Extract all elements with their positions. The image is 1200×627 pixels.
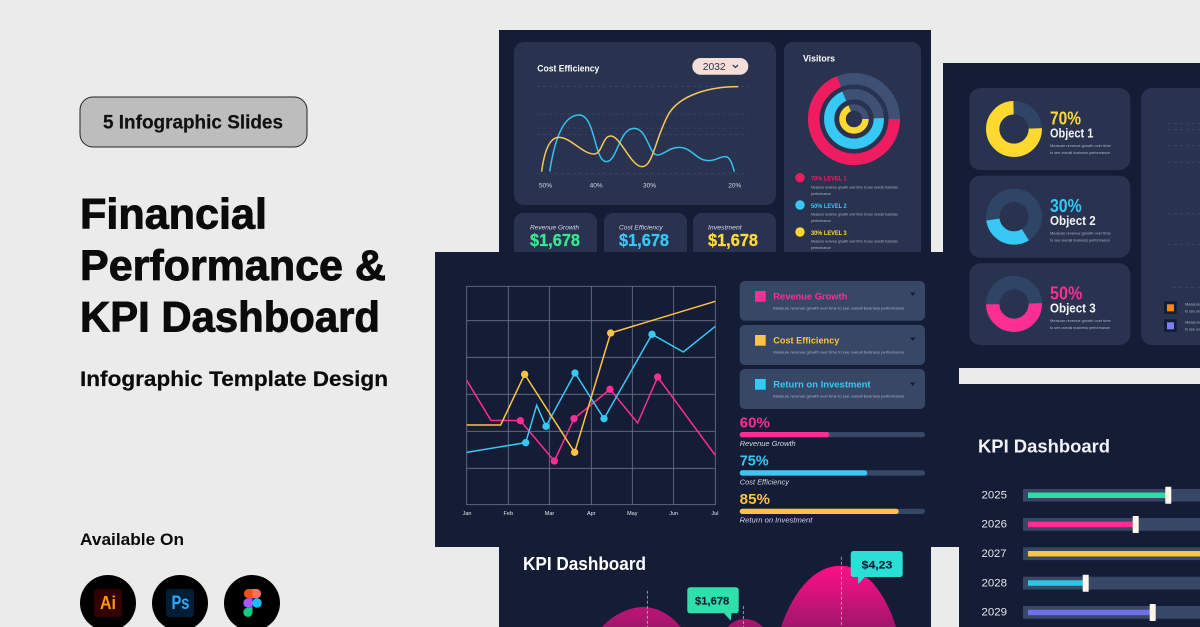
axis labels: 30%: [643, 182, 656, 189]
slider: 2027: [982, 547, 1200, 560]
progress: revenue growth 60%: [740, 414, 925, 448]
heading: KPI Dashboard: KPI Dashboard: [978, 437, 1110, 457]
axis labels: months: Jun: [669, 511, 678, 517]
legend: orange: [1164, 301, 1200, 314]
card: object 3: to see overall business performance: [1050, 326, 1110, 330]
card: investment: [693, 213, 776, 258]
card: cost efficiency metric: Measure revenue growth over time to see overall business performance: [773, 350, 904, 354]
progress: revenue growth 60%: 60%: [740, 414, 770, 431]
icon: Adobe Photoshop: [152, 575, 208, 627]
card: object 2: [969, 176, 1130, 258]
badge: 5 Infographic Slides: 5 Infographic Slides: [103, 112, 283, 133]
legend: orange: Measure: [1185, 302, 1200, 306]
radial chart: [814, 79, 894, 159]
title: Financial: [80, 190, 267, 238]
dropdown: 2032: [692, 58, 748, 75]
line chart: cost efficiency curves: [542, 87, 738, 172]
heading: Available On: Available On: [80, 531, 184, 549]
slider: 2026: [982, 516, 1200, 533]
card: cost efficiency: Cost Efficiency: [619, 224, 663, 231]
slider: 2025: 2025: [982, 489, 1007, 501]
slider: 2026: 2026: [982, 519, 1007, 531]
card: object 3: Measure revenue growth over time: [1050, 319, 1111, 323]
card: object 1: [969, 88, 1130, 170]
card: cost efficiency: $1,678: [619, 230, 669, 250]
legend: level 2: 50% LEVEL 2: [811, 203, 847, 210]
progress: revenue growth 60%: Revenue Growth: [740, 439, 796, 448]
title: KPI Dashboard: [80, 294, 380, 342]
heading: KPI Dashboard: KPI Dashboard: [523, 554, 646, 574]
legend: level 1: Measure revenue growth over time to see overall business: [811, 185, 898, 189]
card: return on investment metric: Return on Investment: [773, 380, 871, 390]
axis labels: months: Jan: [463, 511, 471, 517]
icon: Adobe Photoshop: Ps: [172, 593, 190, 614]
slider: 2029: 2029: [982, 607, 1007, 619]
legend: purple: Measure: [1185, 320, 1200, 324]
panel: bottom slide KPI area chart: [499, 547, 931, 627]
card: revenue growth: Revenue Growth: [530, 224, 579, 231]
card: object 3: [969, 263, 1130, 345]
legend: level 3: Measure revenue growth over time to see overall business: [811, 239, 898, 243]
heading: Visitors: Visitors: [803, 53, 835, 64]
legend: level 1: 70% LEVEL 1: [811, 176, 847, 183]
card: object 1: Measure revenue growth over time: [1050, 144, 1111, 148]
slider: 2025: [982, 487, 1200, 504]
progress: cost efficiency 75%: [740, 453, 925, 486]
progress: return on investment 85%: 85%: [740, 491, 770, 508]
panel: bottom right slide KPI sliders: [959, 384, 1200, 627]
heading: Cost Efficiency: Cost Efficiency: [537, 63, 599, 73]
panel: right chart card: [1141, 88, 1200, 345]
axis labels: 20%: [728, 182, 742, 189]
legend: level 2: performance: [811, 219, 831, 223]
subtitle: Infographic Template Design: [80, 368, 388, 391]
panel: right slide donuts: [943, 63, 1200, 368]
legend: purple: to see ov: [1185, 328, 1200, 332]
card: object 1: to see overall business performance: [1050, 151, 1110, 155]
progress: cost efficiency 75%: Cost Efficiency: [740, 477, 790, 486]
card: object 1: Object 1: [1050, 126, 1093, 140]
panel: visitors: [784, 42, 921, 258]
legend: purple: [1164, 319, 1200, 332]
card: object 2: Object 2: [1050, 214, 1096, 228]
legend: level 1: [795, 173, 898, 196]
card: cost efficiency: [604, 213, 687, 258]
callout: $4,23: $4,23: [862, 560, 892, 572]
card: return on investment metric: [740, 369, 925, 409]
card: cost efficiency metric: Cost Efficiency: [773, 336, 840, 346]
card: object 2: to see overall business performance: [1050, 239, 1110, 243]
axis labels: months: Feb: [504, 511, 513, 517]
card: object 2: 30%: [1050, 196, 1082, 216]
legend: level 2: Measure revenue growth over time to see overall business: [811, 212, 898, 216]
icon: Adobe Illustrator: [80, 575, 136, 627]
legend: level 1: performance: [811, 192, 831, 196]
axis labels: months: [463, 511, 719, 517]
card: revenue growth metric: Measure revenue growth over time to see overall business performance: [773, 306, 904, 310]
card: object 1: 70%: [1050, 108, 1081, 128]
progress: return on investment 85%: [740, 491, 925, 525]
callout: $1,678: [687, 587, 739, 621]
legend: level 3: 30% LEVEL 3: [811, 230, 847, 237]
slider: 2028: [982, 575, 1200, 592]
card: object 2: Measure revenue growth over time: [1050, 232, 1111, 236]
icon: Adobe Illustrator: Ai: [100, 593, 116, 613]
card: object 3: Object 3: [1050, 302, 1096, 316]
slider: 2029: [982, 604, 1200, 621]
axis labels: 50%: [539, 182, 552, 189]
card: revenue growth metric: Revenue Growth: [773, 292, 847, 302]
card: investment: $1,678: [708, 230, 758, 250]
icon: Figma: [224, 575, 280, 627]
axis labels: months: Mar: [545, 511, 554, 517]
axis labels: months: Apr: [587, 511, 596, 517]
card: object 3: 50%: [1050, 284, 1082, 304]
axis labels: [539, 182, 742, 189]
panel: main slide: [435, 252, 959, 547]
callout: $1,678: $1,678: [695, 595, 729, 607]
panel: intro column: [80, 97, 388, 627]
legend: level 3: [795, 227, 898, 250]
title: [80, 190, 386, 342]
slider: 2028: 2028: [982, 577, 1007, 589]
axis labels: months: May: [627, 511, 638, 517]
card: revenue growth metric: [740, 281, 925, 321]
callout: $4,23: [851, 551, 903, 584]
card: investment: Investment: [708, 224, 743, 231]
legend: orange: to see ov: [1185, 310, 1200, 314]
title: Performance &: [80, 242, 386, 290]
card: return on investment metric: Measure revenue growth over time to see overall business performance: [773, 394, 904, 398]
legend: level 2: [795, 200, 898, 223]
panel: cost efficiency chart: [514, 42, 776, 205]
legend: level 3: performance: [811, 246, 831, 250]
axis labels: 40%: [590, 182, 603, 189]
panel: top slide cost efficiency and visitors: [499, 30, 931, 260]
area chart humps: [602, 557, 896, 627]
line chart: monthly trends: [463, 286, 719, 517]
dropdown: 2032: 2032: [703, 61, 726, 73]
badge: 5 Infographic Slides: [80, 97, 307, 147]
progress: cost efficiency 75%: 75%: [740, 453, 769, 470]
card: revenue growth: [514, 213, 597, 258]
axis labels: months: Jul: [711, 511, 719, 517]
progress: return on investment 85%: Return on Investment: [740, 516, 813, 525]
slider: 2027: 2027: [982, 548, 1006, 560]
card: cost efficiency metric: [740, 325, 925, 365]
card: revenue growth: $1,678: [530, 230, 580, 250]
